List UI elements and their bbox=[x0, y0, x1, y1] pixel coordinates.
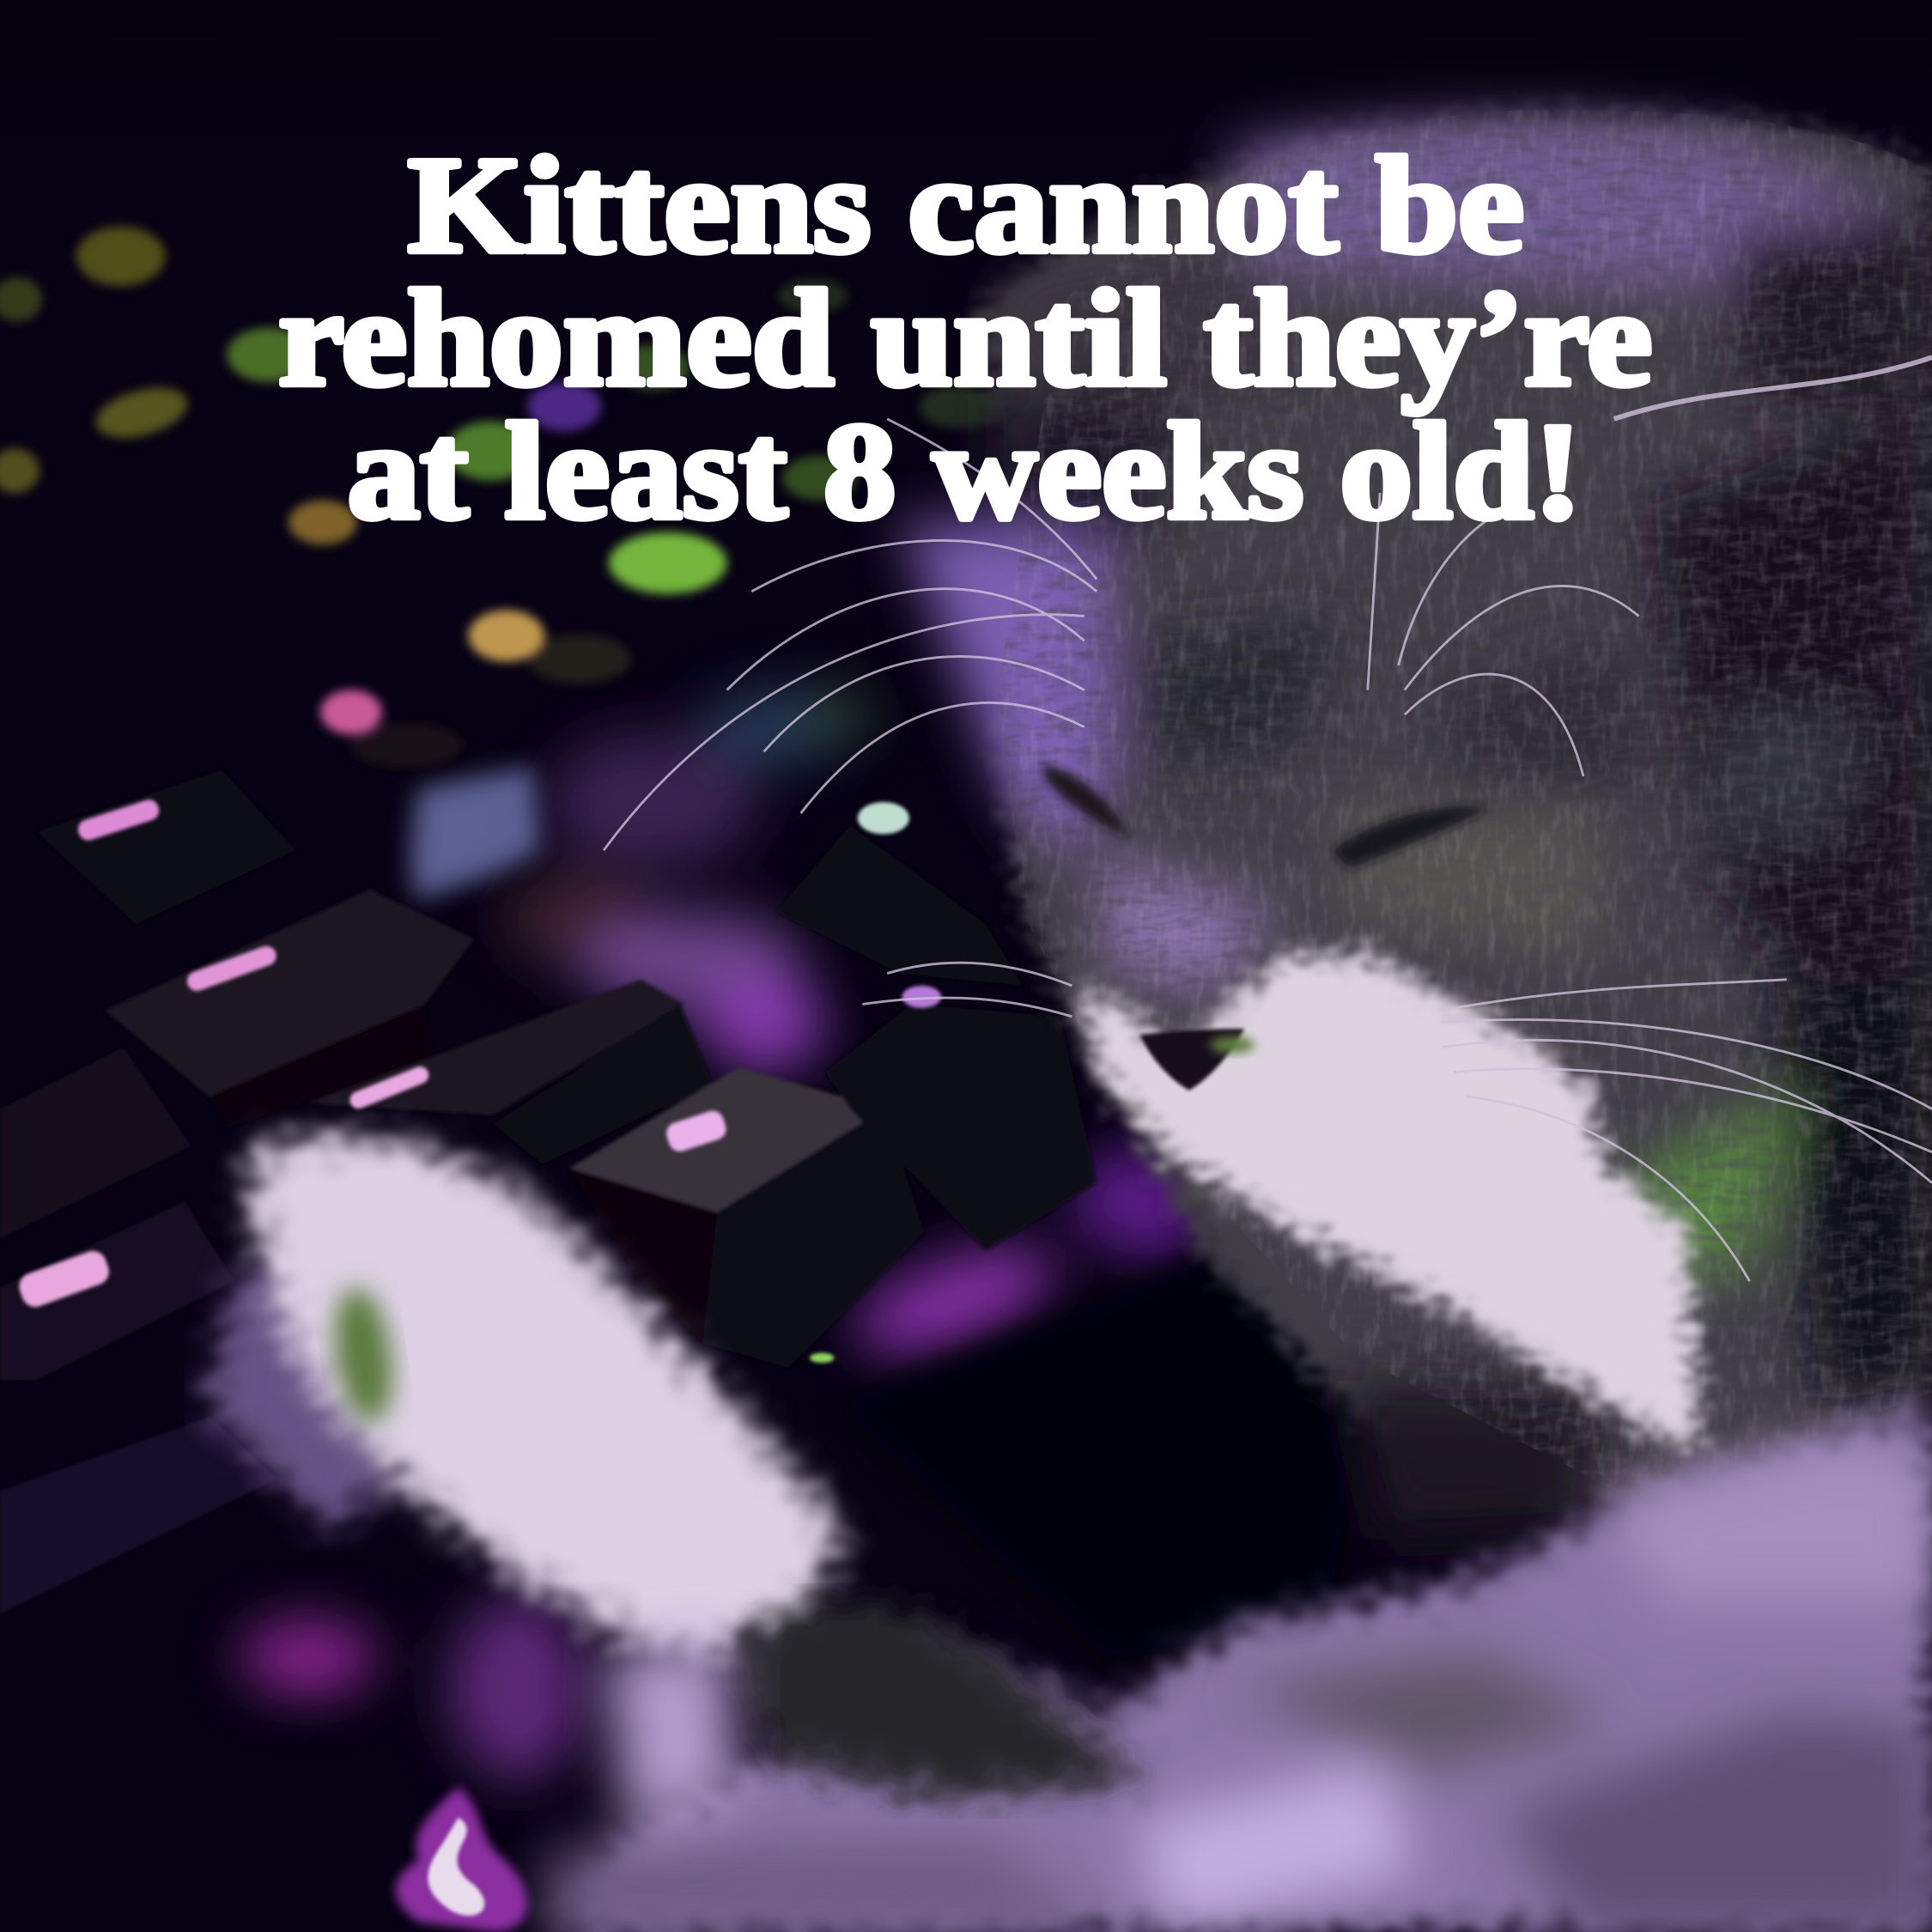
title bbox=[278, 129, 1652, 548]
title: at least 8 weeks old! bbox=[348, 395, 1582, 548]
nose bbox=[1139, 1029, 1244, 1091]
top vignette bbox=[0, 0, 1932, 136]
paw white bbox=[250, 1135, 844, 1663]
paw and lower fur bbox=[204, 1135, 1932, 1932]
title: rehomed until they’re bbox=[278, 262, 1652, 415]
white muzzle and chest bbox=[1078, 955, 1700, 1454]
fuzzy toes bbox=[204, 1269, 394, 1528]
closed eyes bbox=[1331, 806, 1491, 869]
kitten tonal areas bbox=[900, 116, 1932, 1540]
dark patch on arm bbox=[727, 1603, 1146, 1799]
dark desk shadow under kitten bbox=[838, 1244, 1355, 1663]
dark key caps bbox=[0, 770, 1097, 1614]
blurred keyboard lights bbox=[0, 227, 1003, 768]
glowing logo on keyboard bbox=[396, 1787, 527, 1932]
key legends bbox=[15, 797, 941, 1363]
kitten bbox=[603, 83, 1932, 1554]
lower fur bbox=[555, 1405, 1932, 1932]
title: Kittens cannot be bbox=[408, 129, 1524, 282]
blurred purple glow areas bbox=[240, 685, 1220, 1781]
kitten fur base bbox=[974, 111, 1932, 1516]
whiskers bbox=[604, 357, 1932, 1281]
